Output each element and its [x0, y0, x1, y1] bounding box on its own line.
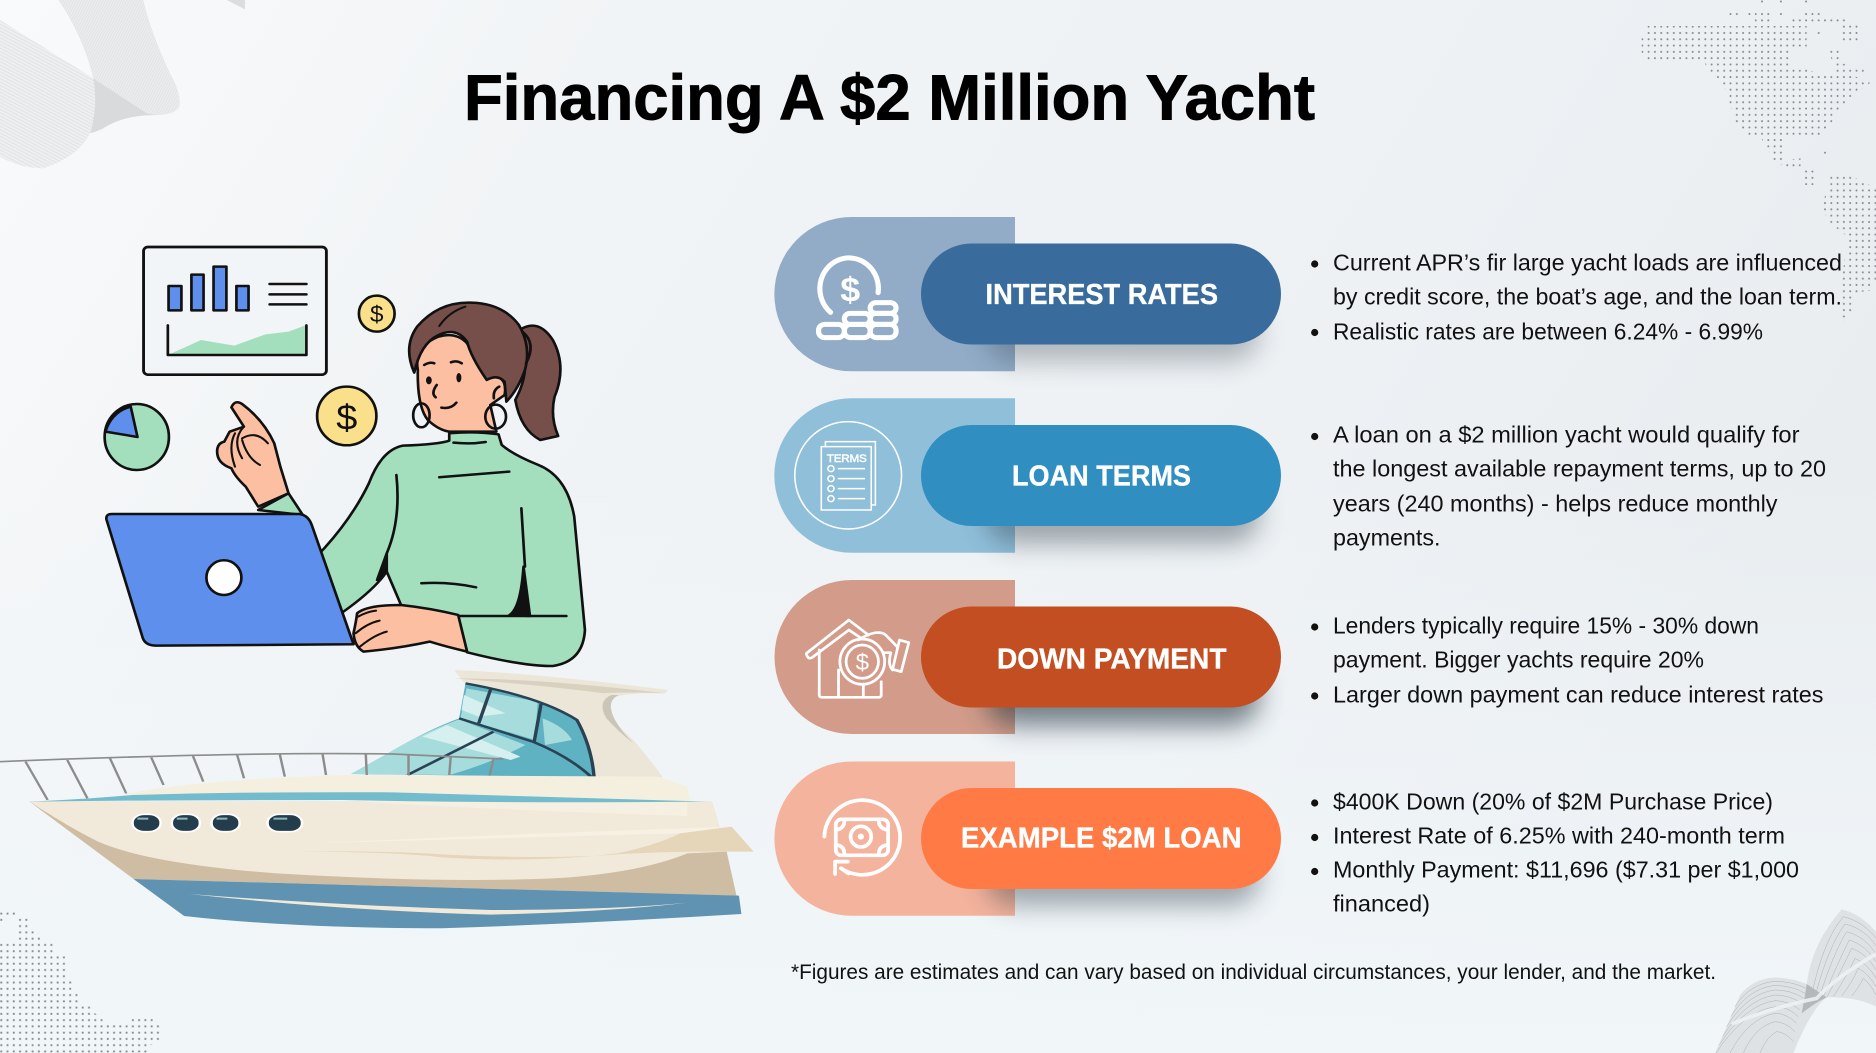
- hair: [409, 303, 527, 402]
- icon: terms document: TERMS: [827, 453, 867, 465]
- chart board: [144, 247, 326, 375]
- text block: example loan: [1311, 788, 1799, 917]
- row: example loan: [774, 762, 1281, 916]
- decorative dotted map bottom left: [0, 911, 160, 1053]
- illustration: woman with laptop and charts: [105, 247, 585, 666]
- text block: interest rates: [1311, 250, 1842, 344]
- small dollar coin: $: [370, 302, 384, 327]
- icon: coins with dollar: [819, 258, 896, 338]
- text block: down payment: [1311, 612, 1824, 708]
- pill label: DOWN PAYMENT: [997, 643, 1227, 675]
- text block: interest rates: by credit score, the boat’s age, and the loan term.: [1333, 284, 1842, 310]
- waterline stripe: [189, 894, 687, 915]
- hull blue bottom: [134, 879, 741, 928]
- small dollar coin: [359, 296, 395, 332]
- text block: down payment: Larger down payment can reduce interest rates: [1333, 682, 1824, 708]
- portholes: [133, 814, 302, 832]
- panel: example loan tab: [774, 762, 1015, 916]
- face and neck: [417, 335, 505, 432]
- swim platform: [609, 827, 754, 855]
- sweater fold lines: [377, 442, 566, 616]
- hull cream side: [29, 802, 727, 880]
- pill label: EXAMPLE $2M LOAN: [961, 822, 1242, 854]
- title: Financing A $2 Million Yacht: [464, 62, 1315, 134]
- teal stripe: [27, 792, 707, 802]
- illustration: yacht: [0, 670, 754, 928]
- ponytail hair: [515, 326, 560, 440]
- pie chart: [105, 404, 169, 470]
- text block: loan terms: [1311, 422, 1826, 551]
- icon: banknote cycle: [824, 800, 900, 875]
- light band: [344, 801, 687, 816]
- sweater body: [310, 432, 585, 666]
- pill label: LOAN TERMS: [1012, 461, 1191, 493]
- facial features: [413, 307, 531, 429]
- text block: example loan: Monthly Payment: $11,696 ($7.31 per $1,000: [1333, 856, 1799, 882]
- row: interest rates: [774, 217, 1281, 371]
- footnote: *Figures are estimates and can vary based on individual circumstances, your lender, and the market.: [791, 960, 1716, 984]
- text block: down payment: Lenders typically require 15% - 30% down: [1333, 612, 1759, 638]
- large dollar coin: $: [336, 398, 357, 437]
- deck: [125, 775, 690, 802]
- panel: down payment tab: [774, 580, 1015, 734]
- pill: example loan: [921, 788, 1281, 889]
- shadow under pill: [985, 662, 1260, 726]
- text block: loan terms: A loan on a $2 million yacht would qualify for: [1333, 422, 1800, 448]
- pill: interest rates: [921, 244, 1281, 344]
- decorative ribbon top left: [0, 0, 245, 168]
- text block: loan terms: the longest available repayment terms, up to 20: [1333, 456, 1826, 482]
- hull streak: [312, 827, 732, 843]
- windshield: [351, 683, 594, 777]
- shadow under pill: [985, 482, 1260, 544]
- text block: loan terms: years (240 months) - helps reduce monthly: [1333, 491, 1778, 517]
- pointing hand and cuff: [217, 402, 303, 515]
- pill: down payment: [921, 606, 1281, 708]
- row: loan terms: [774, 398, 1281, 553]
- pill label: INTEREST RATES: [986, 279, 1218, 311]
- panel: interest rates tab: [774, 217, 1015, 371]
- cabin top: [454, 670, 668, 777]
- resting hand: [354, 605, 467, 652]
- icon: coins with dollar: $: [840, 271, 861, 309]
- pill: loan terms: [921, 425, 1281, 526]
- text block: example loan: $400K Down (20% of $2M Purchase Price): [1333, 788, 1773, 814]
- railing: [0, 754, 503, 800]
- laptop: [106, 514, 354, 646]
- text block: loan terms: payments.: [1333, 525, 1440, 551]
- text block: down payment: payment. Bigger yachts require 20%: [1333, 646, 1704, 672]
- row: down payment: [774, 580, 1281, 734]
- shadow under pill: [985, 844, 1260, 906]
- text block: example loan: financed): [1333, 891, 1430, 917]
- panel: loan terms tab: [774, 398, 1015, 553]
- text block: interest rates: Realistic rates are between 6.24% - 6.99%: [1333, 318, 1763, 344]
- icon: terms document: [795, 422, 902, 529]
- decorative ribbon bottom right: [1715, 909, 1876, 1053]
- text block: example loan: Interest Rate of 6.25% with 240-month term: [1333, 822, 1785, 848]
- large dollar coin: [317, 387, 376, 445]
- icon: house with coin and hand: [806, 620, 909, 697]
- hull tan layer: [29, 802, 736, 896]
- hull crease line: [297, 851, 624, 859]
- shadow under pill: [985, 300, 1260, 362]
- icon: house with coin and hand: $: [856, 650, 869, 676]
- decorative dotted map top right: [1642, 0, 1876, 322]
- text block: interest rates: Current APR’s fir large yacht loads are influenced: [1333, 250, 1842, 276]
